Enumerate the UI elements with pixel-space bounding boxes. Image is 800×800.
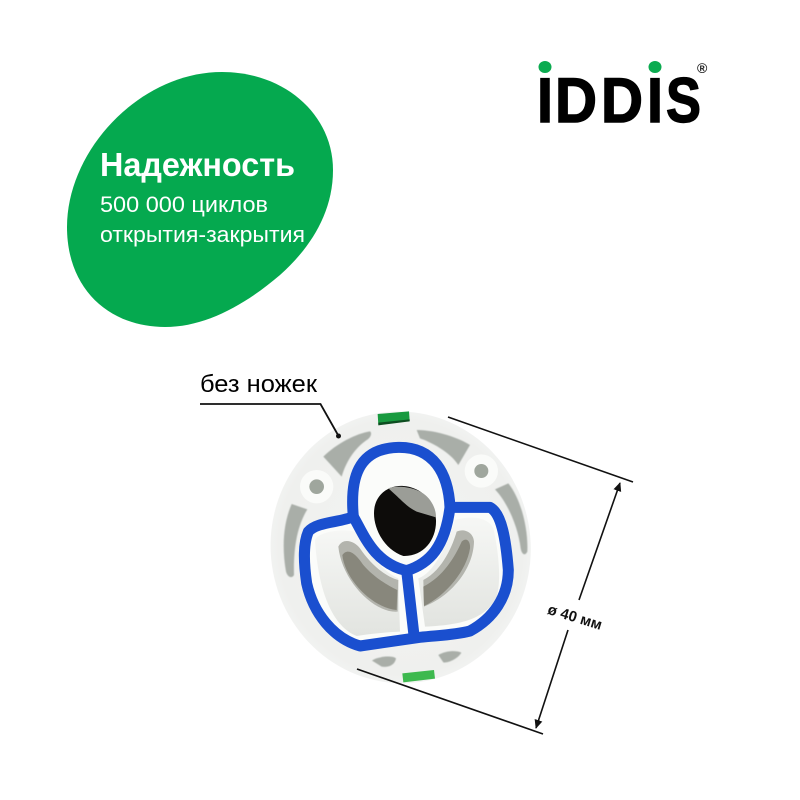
- logo: IDDIS: I: [647, 66, 663, 136]
- panel: green blob with reliability text: [67, 72, 333, 327]
- green tabs: [378, 411, 435, 682]
- right chamber: [418, 518, 499, 627]
- logo: IDDIS: S: [666, 66, 701, 136]
- slots: [284, 430, 527, 667]
- logo: IDDIS: ®: [697, 60, 708, 76]
- heading: reliability: Надежность: [100, 146, 295, 183]
- logo: IDDIS: D: [601, 66, 643, 136]
- text: cycle count: 500 000 циклов: [100, 192, 268, 217]
- blue seal: [304, 447, 508, 646]
- logo: IDDIS: I: [537, 66, 553, 136]
- logo: IDDIS: D: [555, 66, 597, 136]
- left chamber: [315, 530, 400, 636]
- text: opening and closing: открытия-закрытия: [100, 222, 305, 247]
- callout: without legs: [200, 371, 341, 438]
- callout: without legs: без ножек: [200, 371, 318, 398]
- central port: [360, 455, 442, 563]
- dimension: 40 mm diameter: [357, 417, 633, 734]
- white seal seat: [304, 447, 509, 646]
- cartridge photo: [253, 395, 548, 700]
- disk body: [253, 395, 548, 700]
- dimension: 40 mm diameter: ø 40 мм: [546, 601, 604, 634]
- screw holes: [300, 454, 498, 503]
- logo: IDDIS: [537, 60, 708, 136]
